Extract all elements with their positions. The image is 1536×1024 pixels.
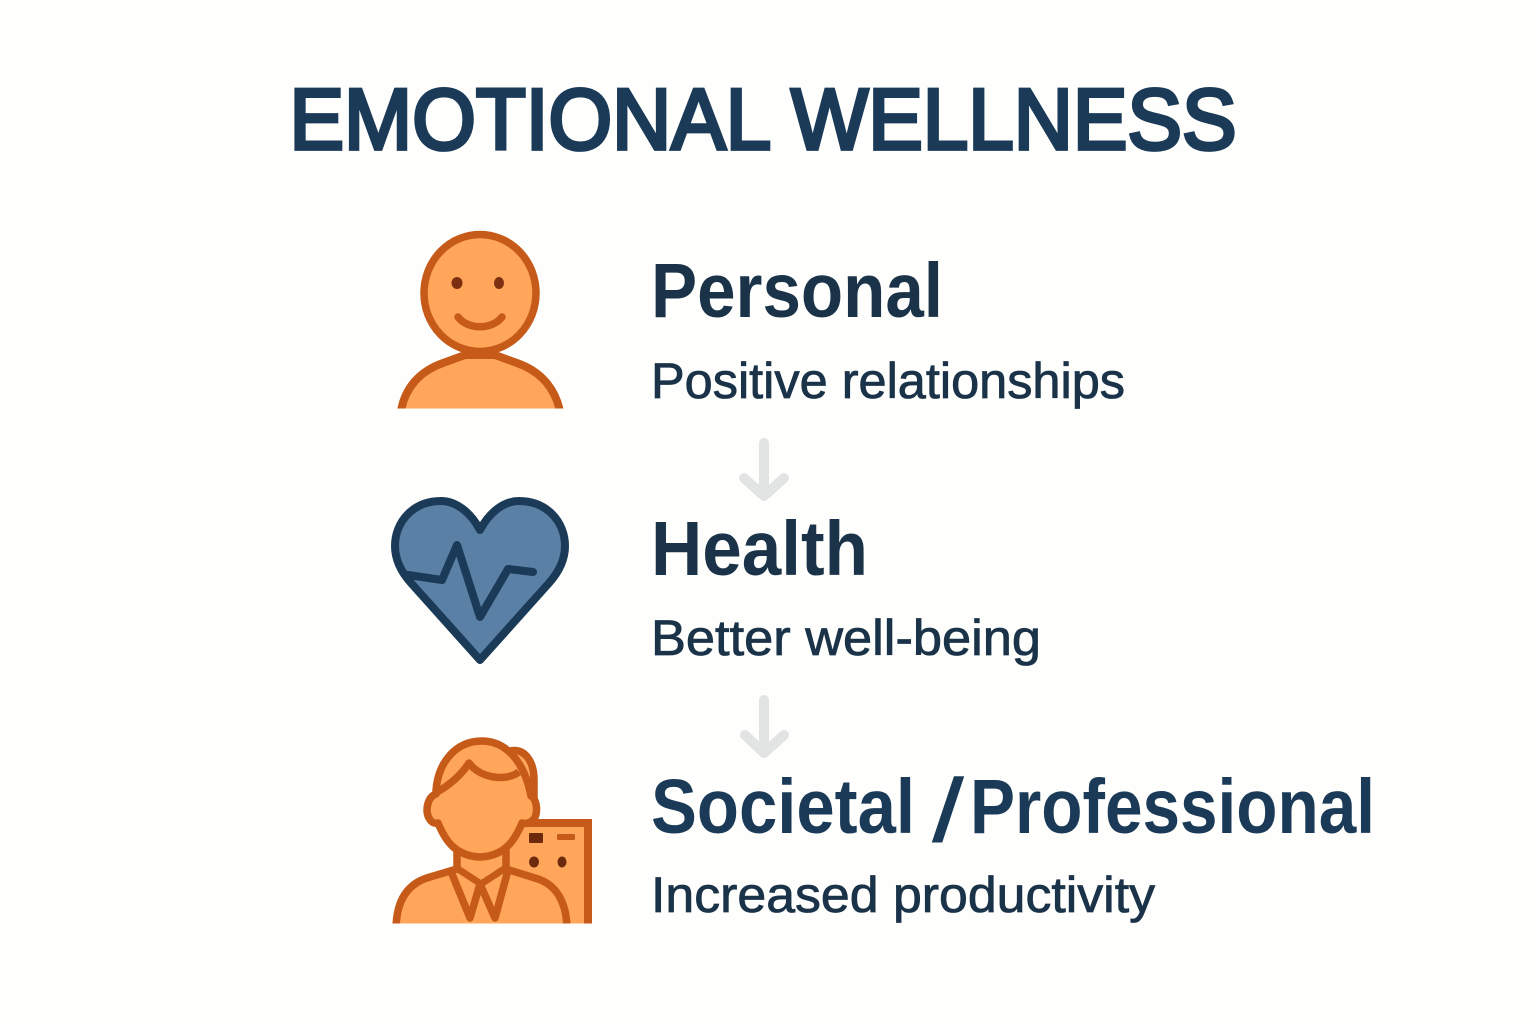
text: positive relationships: Positive relationships <box>651 353 1125 409</box>
icon part: building <box>500 822 589 924</box>
icon part: head and hair <box>427 741 537 857</box>
heading: societal / professional: / <box>933 761 964 860</box>
icon: smiling person <box>400 234 560 414</box>
text: better well-being: Better well-being <box>651 610 1041 666</box>
row: societal professional <box>396 741 1375 930</box>
arrow: health to societal <box>745 700 784 753</box>
title: EMOTIONAL WELLNESS <box>290 72 1236 168</box>
heading: health: Health <box>651 506 868 592</box>
icon part: shoulders and collar <box>396 850 567 930</box>
heading: societal / professional <box>651 761 1375 860</box>
row: health <box>395 501 1041 666</box>
heading: societal / professional: Societal <box>651 764 915 850</box>
row: personal <box>400 234 1125 414</box>
heading: societal / professional: Professional <box>970 764 1375 850</box>
heading: personal: Personal <box>651 248 943 334</box>
arrow: personal to health <box>744 443 784 496</box>
icon: heart with pulse <box>395 501 565 660</box>
icon: professional with building <box>396 741 589 930</box>
text: increased productivity: Increased productivity <box>651 867 1155 923</box>
